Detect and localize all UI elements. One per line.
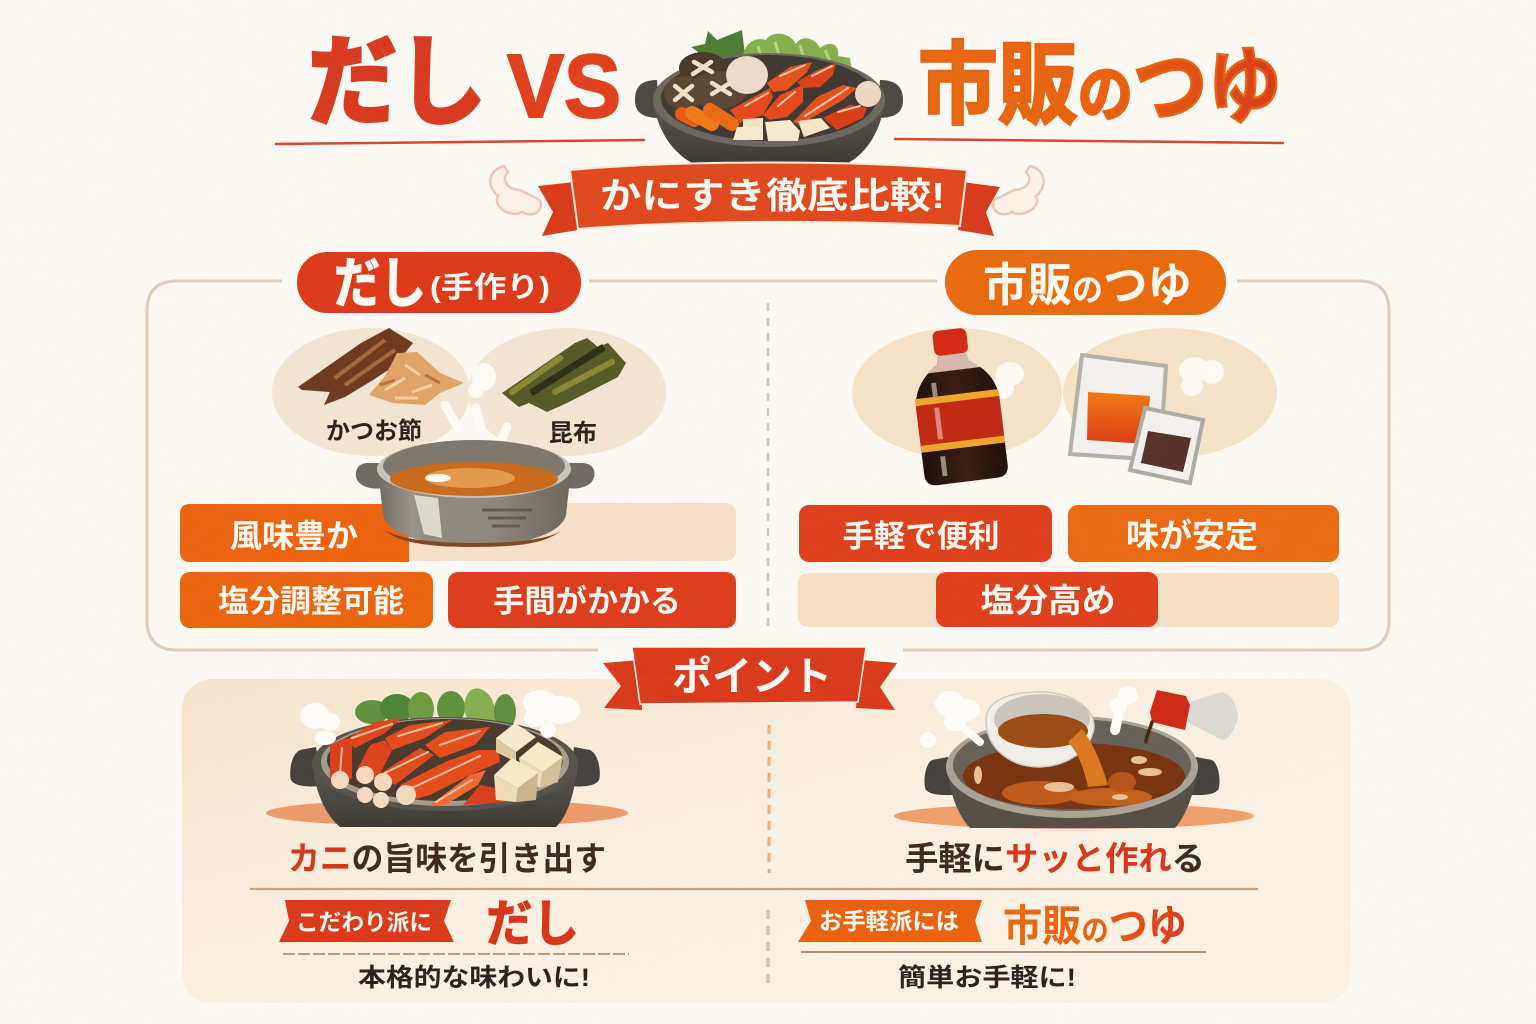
chip: 味が安定 bbox=[1068, 505, 1339, 562]
ingredient backdrops: dashi bbox=[272, 328, 666, 456]
chip: 塩分調整可能: 塩分調整可能 bbox=[218, 584, 404, 619]
body bbox=[378, 470, 571, 546]
title: right 市販のつゆ: 市販のつゆ bbox=[918, 36, 1282, 136]
rim bbox=[312, 717, 578, 811]
pour stream bbox=[1068, 729, 1108, 787]
ingredient backdrops: store-bought bbox=[852, 328, 1277, 458]
tag: こだわり派に bbox=[279, 900, 454, 942]
chip: 塩分調整可能 bbox=[180, 572, 433, 628]
right shrimp bbox=[855, 81, 881, 107]
chip back bar left bbox=[400, 503, 736, 561]
shadow bbox=[894, 803, 1254, 829]
tag: お手軽派には: お手軽派には bbox=[819, 908, 959, 934]
leaves bbox=[355, 685, 516, 735]
tag: お手軽派には bbox=[798, 900, 982, 942]
handles bbox=[290, 747, 322, 786]
icon: top crab hot pot bbox=[635, 30, 903, 163]
main bbox=[570, 162, 967, 229]
bowl bbox=[986, 692, 1094, 767]
crab meat ends bbox=[331, 766, 416, 808]
steam bbox=[920, 686, 1138, 748]
mushrooms bbox=[664, 52, 747, 110]
title: left だし VS bbox=[308, 27, 621, 137]
carrots bbox=[682, 110, 732, 124]
body bbox=[947, 767, 1198, 828]
chip: 味が安定: 味が安定 bbox=[1126, 517, 1258, 554]
handles bbox=[356, 463, 384, 489]
steam bbox=[300, 690, 580, 745]
leaves bbox=[691, 30, 858, 86]
left cloud bbox=[490, 166, 541, 214]
text: 本格的な味わいに!: 本格的な味わいに! bbox=[358, 964, 590, 992]
title underlines bbox=[276, 139, 1283, 144]
title: left だし VS: だし bbox=[308, 27, 486, 137]
tofu bbox=[733, 118, 830, 141]
panel: comparison frame bbox=[147, 281, 1389, 650]
icon: dashi pot with steam bbox=[356, 363, 594, 547]
chip: 塩分高め with back bar bbox=[798, 572, 1339, 627]
pot handles bbox=[635, 80, 660, 118]
icon: katsuobushi bbox=[298, 328, 464, 405]
small bottle bbox=[1146, 690, 1238, 742]
chip: 手軽で便利: 手軽で便利 bbox=[842, 519, 1000, 554]
rim bbox=[946, 716, 1198, 818]
chip: 手間がかかる bbox=[448, 572, 736, 628]
tag: こだわり派に: こだわり派に bbox=[296, 909, 432, 935]
soup bbox=[390, 462, 558, 496]
shadow bbox=[266, 799, 628, 827]
right cloud bbox=[993, 166, 1044, 214]
icon: pouring hot pot (store-bought) bbox=[894, 686, 1254, 829]
icon: steam puffs bbox=[990, 357, 1224, 399]
title: left だし VS: VS bbox=[507, 37, 621, 137]
dashed rule left bbox=[283, 953, 629, 955]
text: カニの旨味を引き出す: カニの旨味を引き出す bbox=[288, 840, 606, 877]
soup bbox=[963, 743, 1185, 809]
icon: soy sauce bottle bbox=[907, 324, 1009, 487]
big label: だし: だし bbox=[486, 896, 579, 952]
crab legs bbox=[330, 718, 508, 806]
text: 手軽にサッと作れる: 手軽にサッと作れる bbox=[905, 840, 1205, 877]
text: 簡単お手軽に!: 簡単お手軽に! bbox=[898, 964, 1076, 992]
pot rim bbox=[653, 53, 885, 147]
heading: 市販のつゆ: 市販のつゆ bbox=[983, 259, 1192, 311]
body bbox=[312, 764, 578, 827]
label: 昆布: 昆布 bbox=[549, 420, 597, 447]
chip: 塩分高め with back bar: 塩分高め bbox=[980, 582, 1116, 619]
panel: point bbox=[182, 679, 1351, 1003]
chip: 手間がかかる: 手間がかかる bbox=[493, 584, 681, 619]
ribbon text: かにすき徹底比較! bbox=[600, 175, 945, 216]
ribbon: ポイント: ポイント bbox=[672, 655, 832, 699]
icon: small pouch bbox=[1130, 408, 1203, 483]
handles bbox=[924, 757, 955, 795]
scallop bbox=[726, 56, 768, 94]
tofu cubes bbox=[494, 723, 563, 802]
big label: 市販のつゆ: 市販のつゆ bbox=[1003, 903, 1187, 951]
steam bbox=[445, 363, 507, 442]
rim bbox=[377, 440, 571, 498]
heading: だし(手作り): (手作り) bbox=[430, 271, 550, 304]
right tail bbox=[958, 182, 1000, 236]
chip: 手軽で便利 bbox=[799, 505, 1052, 562]
point dividers bbox=[250, 725, 1258, 990]
heading: だし(手作り): だし bbox=[334, 254, 426, 314]
pot body bbox=[653, 100, 885, 163]
heading: 市販のつゆ bbox=[945, 250, 1226, 315]
label: かつお節: かつお節 bbox=[326, 418, 422, 445]
chip: 風味豊か bbox=[180, 504, 409, 562]
ribbon: かにすき徹底比較 bbox=[490, 162, 1044, 236]
chip: 風味豊か: 風味豊か bbox=[230, 518, 358, 554]
icon: kombu bbox=[502, 338, 626, 412]
heading: だし(手作り) bbox=[297, 252, 581, 314]
rule right bbox=[801, 951, 1206, 953]
left tail bbox=[538, 182, 578, 236]
crab legs bbox=[730, 62, 867, 130]
ribbon: ポイント bbox=[603, 647, 897, 710]
icon: crab hot pot (dashi) bbox=[266, 685, 628, 827]
icon: large pouch bbox=[1070, 355, 1166, 460]
